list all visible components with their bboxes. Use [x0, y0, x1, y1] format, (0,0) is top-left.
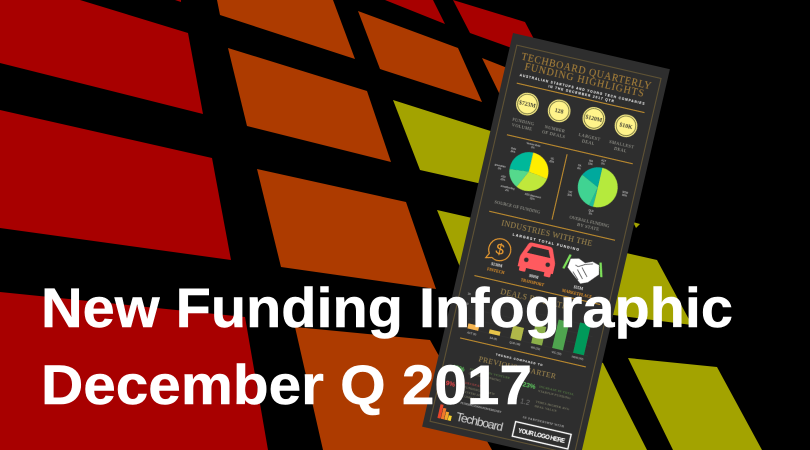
pie chart: source of funding: 2% — [505, 189, 510, 193]
pie chart: overall funding by state: 0% — [577, 167, 582, 171]
footer: data source credit: FUNDING DATA POWERED BY — [460, 401, 503, 414]
stat: smallest deal: $10K — [619, 121, 634, 131]
pie chart: source of funding: 3% — [497, 167, 502, 171]
pie chart: source of funding: 10% — [500, 178, 506, 182]
pie chart: source of funding: 3% — [531, 146, 536, 150]
bar chart: deals by state: WA (20) — [530, 345, 541, 351]
stat: smallest deal — [608, 112, 641, 155]
icon: fintech dollar speech bubble: $ — [494, 240, 507, 259]
pie chart: source of funding: ASX placement — [524, 193, 541, 200]
trend: listed funding decrease — [443, 377, 497, 405]
stat: funding volume: FUNDING — [512, 117, 535, 127]
trend: total funding increase — [522, 381, 575, 401]
stat: number of deals: NUMBER — [544, 124, 566, 134]
trend: listed funding decrease: LISTED ASX — [463, 390, 484, 398]
pie chart: source of funding: SOURCE OF FUNDING — [494, 199, 541, 215]
pie chart: source of funding: VC — [550, 157, 554, 161]
headline — [41, 276, 733, 416]
stat: funding volume — [511, 91, 541, 132]
trend: listed funding decrease: DECREASE IN — [465, 381, 489, 390]
pie chart: overall funding by state: 30% — [567, 193, 573, 198]
bar chart: deals by state: SA (6) — [489, 336, 497, 341]
logo: Techboard wordmark: Techboard — [455, 410, 505, 434]
pie chart: source of funding: 24% — [510, 150, 516, 154]
trend: listed funding decrease: 9% — [445, 380, 456, 389]
icon: fintech dollar speech bubble: $130M — [491, 262, 503, 269]
stat: smallest deal: SMALLEST — [609, 139, 635, 150]
pie chart: overall funding by state: BY STATE — [577, 222, 600, 232]
icon: marketplace handshake: MARKETPLACE — [562, 289, 593, 300]
pie chart: overall funding by state: WA — [589, 159, 593, 163]
trend: venture funding increase — [451, 363, 511, 385]
pie chart: overall funding by state: NSW — [622, 191, 629, 195]
poster title: TECHBOARD QUARTERLY — [520, 52, 652, 92]
trend: venture funding increase: 43% — [451, 364, 465, 374]
pie chart: overall funding by state — [561, 153, 635, 236]
trends heading: TRENDS COMPARED TO — [495, 352, 544, 367]
trend: listed funding decrease: COMPANIES — [462, 394, 483, 403]
trend: total funding increase: 23% — [522, 381, 536, 391]
pie chart: source of funding: greenplate — [494, 163, 507, 169]
trend: deal value multiple — [519, 396, 570, 416]
bar chart: deals by state: DEALS BY STATE — [500, 287, 568, 311]
poster subtitle: IN THE DECEMBER 2017 QTR — [548, 85, 615, 104]
pie chart: source of funding: Venture Debt — [526, 142, 541, 148]
stat: number of deals: 128 — [554, 108, 564, 116]
poster subtitle: AUSTRALIAN STARTUPS AND YOUNG TECH COMPANIES — [519, 73, 645, 106]
stat: number of deals: OF DEALS — [542, 129, 566, 139]
icon: marketplace handshake — [558, 254, 605, 301]
bar chart: deals by state: ACT (6) — [467, 330, 477, 336]
icon: fintech dollar speech bubble: FINTECH — [487, 267, 505, 275]
trend: deal value multiple: 1.2 — [519, 398, 530, 407]
pie chart: overall funding by state: QLD — [588, 209, 594, 213]
pie chart: overall funding by state: 50% — [622, 194, 628, 198]
pie chart: source of funding: 32% — [529, 197, 536, 201]
stat: number of deals — [542, 97, 573, 139]
pie chart: overall funding by state: 3% — [588, 212, 593, 216]
stat: funding volume: VOLUME — [511, 122, 533, 132]
stat: largest deal: LARGEST — [578, 132, 601, 142]
trend: venture funding increase: CAPITAL FUNDING — [468, 371, 502, 383]
pie chart: source of funding: 25% — [549, 160, 555, 164]
footer: partnership credit: IN PARTNERSHIP WITH — [522, 415, 565, 429]
infographic poster, rotated — [422, 33, 670, 450]
trend: total funding increase: INCREASE IN TOTAL — [539, 384, 575, 396]
bar chart: deals by state — [459, 280, 599, 362]
stat: funding volume: $723M — [518, 99, 537, 110]
bar chart: deals by state: 20 — [465, 301, 469, 306]
logo mark: Techboard stepped bars — [437, 404, 454, 421]
icon: transport car: TRANSPORT — [520, 278, 545, 287]
trends heading: PREVIOUS QUARTER — [478, 354, 557, 381]
stat: smallest deal: DEAL — [614, 146, 627, 154]
bar chart: deals by state: 10 — [463, 311, 467, 316]
trend: deal value multiple: TIMES HIGHER AVG — [535, 400, 570, 411]
bar chart: deals by state: QLD (18) — [509, 340, 521, 347]
pie chart: overall funding by state: VIC — [568, 191, 573, 194]
trend: total funding increase: STARTUP FUNDING — [538, 389, 572, 400]
poster title: FUNDING HIGHLIGHTS — [523, 62, 645, 100]
pie chart: source of funding — [486, 136, 558, 215]
headline: New Funding Infographic — [41, 276, 733, 339]
icon: marketplace handshake: $55M — [573, 285, 584, 291]
trend: deal value multiple: DEAL VALUE — [534, 404, 557, 413]
industries heading: LARGEST TOTAL FUNDING — [512, 233, 580, 252]
pie chart: source of funding: Debt — [511, 147, 517, 151]
pie chart: overall funding by state: SA — [578, 164, 582, 168]
pie chart: overall funding by state: ACT — [601, 159, 607, 163]
icon: transport car: $80M — [529, 274, 539, 280]
pie chart: overall funding by state: OVERALL FUNDING — [569, 215, 611, 229]
stat: largest deal: $120M — [585, 114, 603, 124]
bar chart: deals by state: NSW (40) — [571, 355, 584, 361]
trend: listed funding decrease: FUNDING OF NEW — [464, 385, 496, 396]
logo placeholder box — [512, 422, 571, 449]
headline: December Q 2017 — [41, 353, 532, 416]
industries heading: INDUSTRIES WITH THE — [501, 218, 593, 248]
pie chart: overall funding by state: 0% — [601, 162, 606, 166]
pie chart: source of funding: crowdfunding — [500, 185, 515, 191]
stat: largest deal: DEAL — [581, 138, 595, 146]
icon: fintech dollar speech bubble — [483, 236, 513, 275]
bar chart: deals by state: VIC (30) — [551, 350, 562, 356]
trend: venture funding increase: INCREASE IN VENTURE — [469, 367, 511, 380]
stat: largest deal — [577, 105, 607, 147]
pie chart: overall funding by state: 15% — [588, 162, 594, 166]
bar chart: deals by state: 30 — [467, 292, 472, 296]
pie chart: source of funding: ASX — [501, 175, 506, 179]
logo placeholder box: YOUR LOGO HERE — [517, 428, 565, 445]
icon: transport car — [514, 241, 559, 289]
